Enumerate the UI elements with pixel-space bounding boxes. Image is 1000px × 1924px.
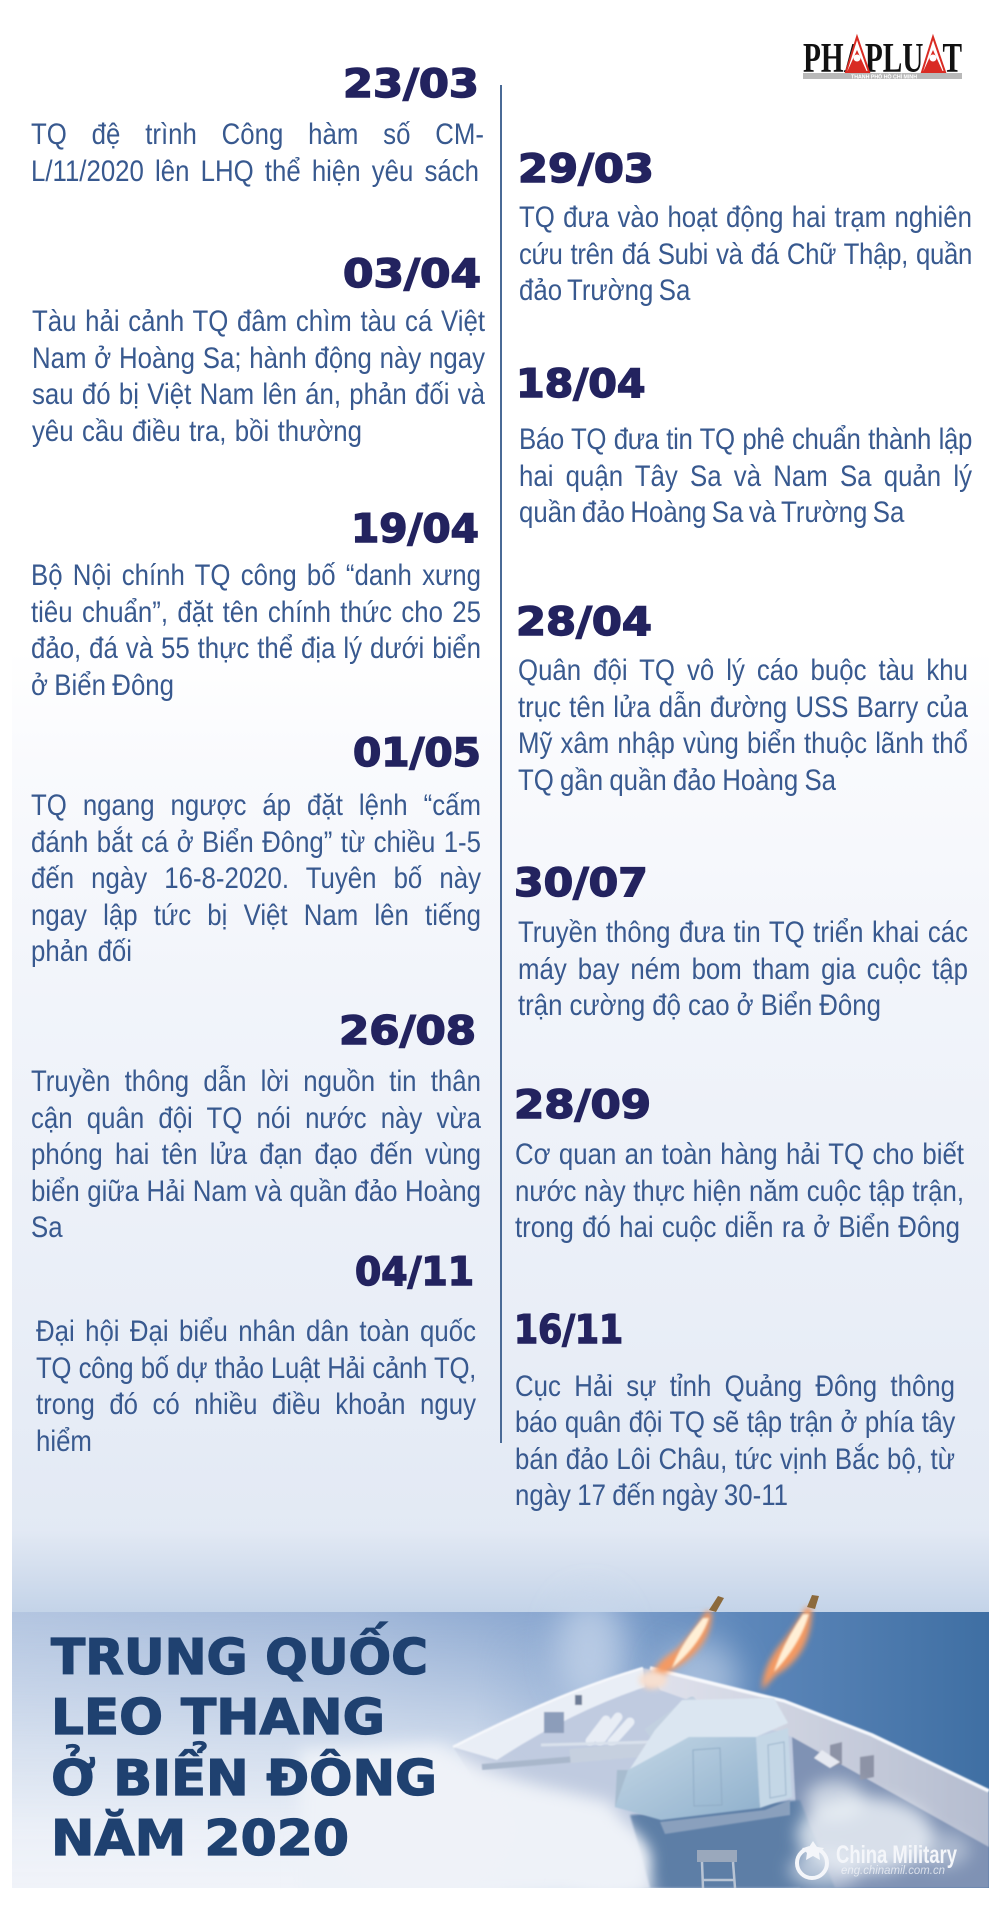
text: 19/04: ở Biển Đông	[31, 669, 174, 702]
left bulwark	[453, 1668, 645, 1760]
ship deck	[453, 1668, 989, 1888]
rocket flames	[639, 1607, 812, 1690]
turret base	[630, 1800, 835, 1888]
text: 04/11: TQ công bố dự thảo Luật Hải cảnh TQ,	[36, 1352, 476, 1385]
date: 28/09: 28/09	[514, 1083, 651, 1128]
text: 03/04: Nam ở Hoàng Sa; hành động này ngay	[32, 342, 485, 375]
event: 30/07	[514, 861, 968, 1022]
watermark: China Military	[797, 1841, 957, 1878]
event: 29/03	[518, 147, 972, 307]
text: 01/05: ngay lập tức bị Việt Nam lên tiếng	[31, 899, 481, 932]
text: 23/03: TQ đệ trình Công hàm số CM-	[31, 118, 484, 151]
event: 03/04	[32, 252, 485, 448]
date: 29/03: 29/03	[518, 147, 654, 192]
text: 23/03: L/11/2020 lên LHQ thể hiện yêu sách	[31, 155, 479, 188]
date: 28/04: 28/04	[516, 600, 652, 645]
text: 01/05	[31, 789, 481, 968]
deck box	[544, 1712, 564, 1733]
text: 19/04	[31, 559, 481, 702]
rockets	[709, 1595, 819, 1612]
text: 29/03	[519, 201, 972, 307]
text: 28/04: Quân đội TQ vô lý cáo buộc tàu khu	[518, 654, 968, 687]
text: 18/04: quần đảo Hoàng Sa và Trường Sa	[519, 496, 904, 529]
stairs	[697, 1850, 737, 1888]
text: 16/11: báo quân đội TQ sẽ tập trận ở phía tây	[515, 1406, 955, 1439]
date: 03/04: 03/04	[343, 252, 481, 297]
text: 01/05: đánh bắt cá ở Biển Đông” từ chiều 1-5	[31, 826, 481, 859]
event: 23/03	[31, 62, 484, 188]
title	[51, 1621, 437, 1867]
date: 23/03: 23/03	[343, 62, 479, 107]
right bulwark wall	[650, 1668, 989, 1847]
turret	[615, 1698, 792, 1834]
text: 19/04: Bộ Nội chính TQ công bố “danh xưng	[31, 559, 481, 592]
text: 23/03	[31, 118, 484, 188]
text: 04/11: Đại hội Đại biểu nhân dân toàn quốc	[36, 1315, 476, 1348]
date: 01/05: 01/05	[353, 731, 481, 776]
text: 30/07: Truyền thông đưa tin TQ triển khai các	[518, 916, 968, 949]
text: 29/03: TQ đưa vào hoạt động hai trạm nghiên	[519, 201, 972, 234]
logo: Pháp Luật: THANH PHỐ HỒ CHÍ MINH	[851, 72, 917, 80]
title: Ở BIỂN ĐÔNG	[51, 1740, 437, 1807]
text: 29/03: cứu trên đá Subi và đá Chữ Thập, quần	[519, 238, 972, 271]
event: 01/05	[31, 731, 481, 968]
text: 29/03: đảo Trường Sa	[519, 274, 690, 307]
text: 03/04	[32, 305, 485, 448]
title: LEO THANG	[51, 1689, 385, 1746]
date: 04/11: 04/11	[355, 1250, 474, 1295]
text: 04/11: hiểm	[36, 1425, 92, 1458]
text: 01/05: phản đối	[31, 935, 132, 968]
text: 28/09: trong đó hai cuộc diễn ra ở Biển Đông	[515, 1211, 960, 1244]
text: 04/11: trong đó có nhiều điều khoản nguy	[36, 1388, 476, 1421]
text: 28/04: TQ gần quần đảo Hoàng Sa	[518, 764, 836, 797]
event: 28/09	[514, 1083, 964, 1244]
text: 16/11: Cục Hải sự tỉnh Quảng Đông thông	[515, 1370, 955, 1403]
title: TRUNG QUỐC	[51, 1621, 428, 1686]
text: 26/08: biển giữa Hải Nam và quần đảo Hoàng	[31, 1175, 481, 1208]
text: 18/04: Báo TQ đưa tin TQ phê chuẩn thành lập	[519, 423, 972, 456]
text: 19/04: đảo, đá và 55 thực thể địa lý dưới biển	[31, 632, 481, 665]
text: 28/09	[515, 1138, 964, 1244]
text: 26/08: Truyền thông dẫn lời nguồn tin thân	[31, 1065, 481, 1098]
text: 30/07: máy bay ném bom tham gia cuộc tập	[518, 953, 968, 986]
event: 04/11	[36, 1250, 476, 1458]
event: 28/04	[516, 600, 968, 797]
smoke in front	[624, 1772, 974, 1888]
watermark: China Military: eng.chinamil.com.cn	[841, 1865, 945, 1877]
text: 18/04: hai quận Tây Sa và Nam Sa quản lý	[519, 460, 972, 493]
text: 28/09: Cơ quan an toàn hàng hải TQ cho biết	[515, 1138, 964, 1171]
text: 30/07: trận cường độ cao ở Biển Đông	[518, 989, 881, 1022]
date: 16/11: 16/11	[514, 1308, 623, 1353]
text: 19/04: tiêu chuẩn”, đặt tên chính thức cho 25	[31, 596, 481, 629]
text: 16/11: ngày 17 đến ngày 30-11	[515, 1479, 788, 1512]
event: 18/04	[516, 362, 972, 529]
title: NĂM 2020	[51, 1808, 349, 1867]
watermark: China Military: China Military	[836, 1841, 957, 1869]
text: 28/09: nước này thực hiện năm cuộc tập trận,	[515, 1175, 964, 1208]
text: 26/08	[31, 1065, 481, 1244]
event: 26/08	[31, 1009, 481, 1244]
text: 03/04: yêu cầu điều tra, bồi thường	[32, 415, 362, 448]
date: 30/07: 30/07	[514, 861, 648, 906]
text: 04/11	[36, 1315, 476, 1458]
text: 18/04	[519, 423, 972, 529]
text: 03/04: sau đó bị Việt Nam lên án, phản đối và	[32, 378, 485, 411]
date: 18/04: 18/04	[516, 362, 646, 407]
date: 26/08: 26/08	[339, 1009, 476, 1054]
event: 19/04	[31, 507, 481, 702]
decoy tubes	[590, 1717, 630, 1742]
text: 26/08: Sa	[31, 1211, 63, 1244]
text: 03/04: Tàu hải cảnh TQ đâm chìm tàu cá Việt	[32, 305, 485, 338]
right deck floor	[792, 1737, 989, 1888]
gun barrel	[482, 1700, 696, 1767]
timeline axis	[500, 85, 502, 1443]
text: 16/11	[515, 1370, 956, 1512]
text: 26/08: phóng hai tên lửa đạn đạo đến vùng	[31, 1138, 481, 1171]
text: 01/05: đến ngày 16-8-2020. Tuyên bố này	[31, 862, 481, 895]
text: 01/05: TQ ngang ngược áp đặt lệnh “cấm	[31, 789, 481, 822]
text: 28/04	[518, 654, 968, 797]
date: 19/04: 19/04	[351, 507, 479, 552]
text: 16/11: bán đảo Lôi Châu, tức vịnh Bắc bộ, từ	[515, 1443, 955, 1476]
event: 16/11	[514, 1308, 956, 1512]
text: 30/07	[518, 916, 968, 1022]
text: 28/04: trục tên lửa dẫn đường USS Barry của	[518, 691, 968, 724]
text: 26/08: cận quân đội TQ nói nước này vừa	[31, 1102, 481, 1135]
smoke behind the gun	[300, 1745, 655, 1900]
text: 28/04: Mỹ xâm nhập vùng biển thuộc lãnh thổ	[518, 727, 968, 760]
